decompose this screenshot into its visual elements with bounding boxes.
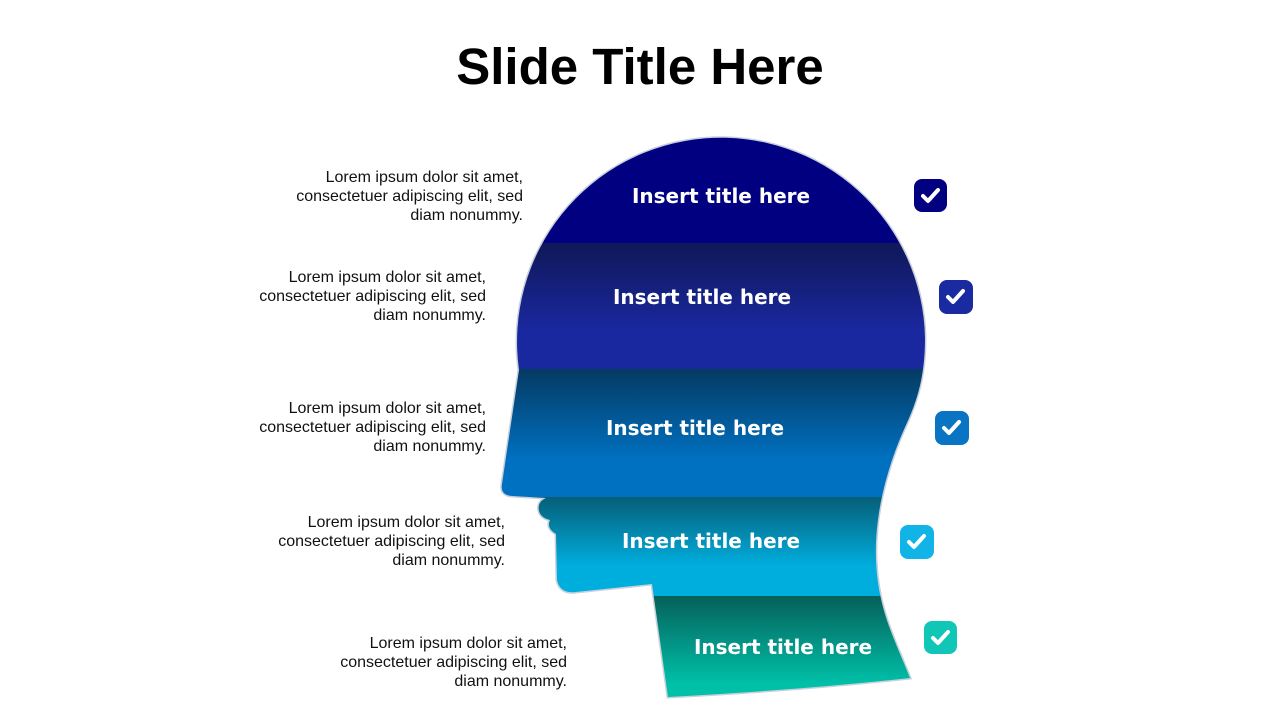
band 1: Insert title here xyxy=(632,184,810,208)
band 2 xyxy=(517,243,925,369)
icon: check 2 xyxy=(939,280,973,314)
band 3 xyxy=(502,369,923,497)
text block 5: diam nonummy. xyxy=(454,673,567,690)
text block 1: diam nonummy. xyxy=(410,207,523,224)
text block 2: Lorem ipsum dolor sit amet, xyxy=(289,269,486,286)
band 4 xyxy=(530,497,882,596)
text block 1 xyxy=(296,169,523,224)
text block 4 xyxy=(278,514,505,569)
head diagram xyxy=(500,136,973,698)
text block 2: diam nonummy. xyxy=(373,307,486,324)
text block 5 xyxy=(340,635,567,690)
icon: check 4 xyxy=(900,525,934,559)
text block 1: consectetuer adipiscing elit, sed xyxy=(296,188,523,205)
text block 4: Lorem ipsum dolor sit amet, xyxy=(308,514,505,531)
band 5 xyxy=(654,596,910,697)
band 1 xyxy=(542,138,900,243)
text block 4: diam nonummy. xyxy=(392,552,505,569)
text block 1: Lorem ipsum dolor sit amet, xyxy=(326,169,523,186)
text block 2 xyxy=(259,269,486,324)
band 5: Insert title here xyxy=(694,635,872,659)
icon: check 5 xyxy=(924,621,957,654)
text block 5: Lorem ipsum dolor sit amet, xyxy=(370,635,567,652)
text block 3 xyxy=(259,400,486,455)
text block 2: consectetuer adipiscing elit, sed xyxy=(259,288,486,305)
band 4: Insert title here xyxy=(622,529,800,553)
text block 4: consectetuer adipiscing elit, sed xyxy=(278,533,505,550)
text block 3: consectetuer adipiscing elit, sed xyxy=(259,419,486,436)
title: Slide Title Here xyxy=(456,38,824,95)
icon: check 1 xyxy=(914,179,947,212)
band 2: Insert title here xyxy=(613,285,791,309)
band 3: Insert title here xyxy=(606,416,784,440)
text block 5: consectetuer adipiscing elit, sed xyxy=(340,654,567,671)
text block 3: diam nonummy. xyxy=(373,438,486,455)
icon: check 3 xyxy=(935,411,969,445)
text block 3: Lorem ipsum dolor sit amet, xyxy=(289,400,486,417)
